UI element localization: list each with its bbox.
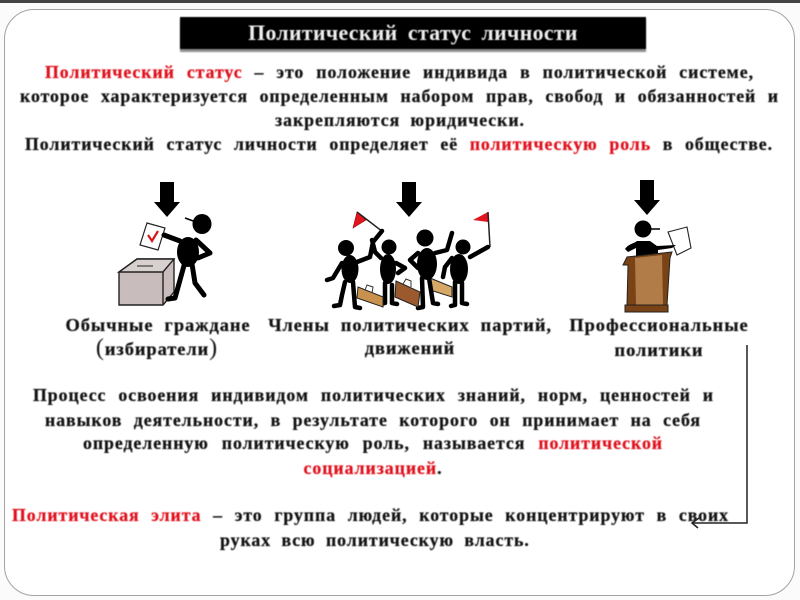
label: professional politicians: Профессиональные — [569, 315, 749, 335]
paragraph: political socialization: навыков деятельности, в результате которого он принимает на себя — [45, 410, 701, 430]
arrow: politicians — [634, 180, 660, 215]
label: ordinary citizens: Обычные граждане — [65, 315, 250, 335]
label: party members — [268, 315, 552, 358]
title banner — [180, 17, 646, 49]
label: professional politicians: политики — [615, 340, 703, 360]
label: party members: Члены политических партий, — [268, 315, 552, 335]
definition: political status: Политический статус личности определяет её политическую роль в обществе. — [25, 134, 773, 154]
definition: political status — [20, 62, 779, 155]
top dark strip — [0, 0, 800, 3]
definition: political status: которое характеризуется определенным набором прав, свобод и обязанностей и — [20, 86, 779, 106]
definition: political status: Политический статус – это положение индивида в политической системе, — [45, 62, 754, 82]
paragraph: political socialization: социализацией. — [304, 458, 442, 478]
paragraph: political socialization: определенную политическую роль, называется политической — [83, 433, 663, 453]
paragraph: political socialization — [32, 385, 714, 478]
label: voters in brackets: (избиратели) — [96, 335, 218, 361]
label: party members: движений — [365, 338, 455, 358]
title banner: Политический статус личности — [248, 21, 578, 45]
arrow: citizens — [154, 182, 180, 217]
arrow: party members — [396, 182, 422, 217]
paragraph: political elite — [12, 505, 729, 551]
definition: political status: закрепляются юридически. — [275, 110, 525, 130]
paragraph: political socialization: Процесс освоения индивидом политических знаний, норм, ценностей и — [33, 385, 714, 405]
label: professional politicians — [569, 315, 749, 360]
paragraph: political elite: Политическая элита – это группа людей, которые концентрируют в своих — [12, 505, 729, 525]
paragraph: political elite: руках всю политическую власть. — [220, 530, 530, 550]
